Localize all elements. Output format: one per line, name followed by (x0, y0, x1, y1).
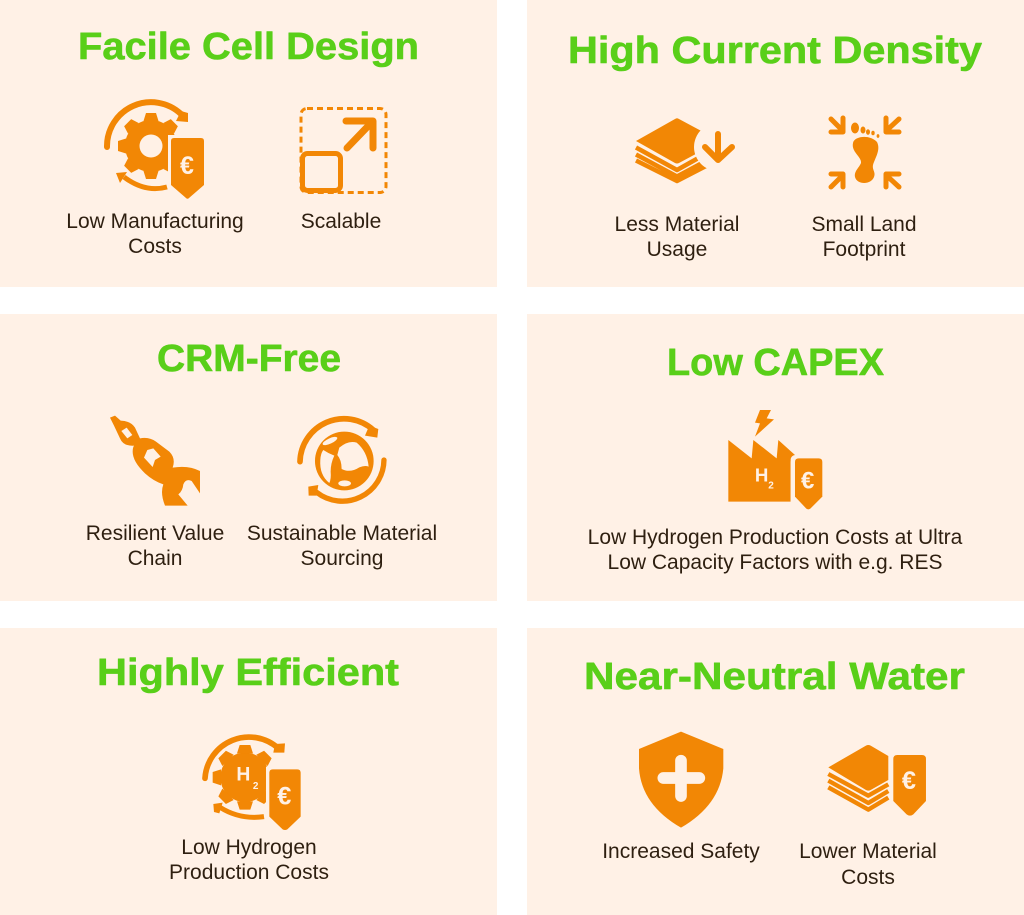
label: Less Material Usage: Usage (647, 238, 707, 261)
icon: footprint with inward arrows (831, 118, 899, 187)
label: Less Material Usage: Less Material (615, 213, 739, 236)
label: Sustainable Material Sourcing: Sustainable Material (247, 522, 437, 545)
icon: factory with lightning, H2 and euro tag: H (755, 465, 768, 486)
heading: Near-Neutral Water: Near-Neutral Water (584, 656, 965, 698)
panel: Highly Efficient (0, 628, 497, 915)
panel: Near-Neutral Water (527, 628, 1024, 915)
label: Resilient Value Chain: Chain (128, 547, 182, 570)
label: Low Hydrogen Production Costs: Low Hydrogen Production Costs at Ultra (588, 526, 962, 549)
icon: gear with euro tag (107, 102, 207, 202)
label: Lower Material Costs: Lower Material (799, 840, 937, 863)
panel background (527, 314, 1024, 601)
icon: scalable square (301, 108, 386, 192)
heading: Low CAPEX: Low CAPEX (667, 342, 885, 384)
icon: factory with lightning, H2 and euro tag (728, 410, 826, 512)
label: Low Manufacturing Costs: Costs (128, 235, 182, 258)
label: Low Manufacturing Costs: Low Manufacturing (66, 210, 244, 233)
label: Low Hydrogen Production Costs: Low Hydrogen (181, 836, 317, 859)
panel background (0, 628, 497, 915)
heading: Highly Efficient: Highly Efficient (97, 652, 399, 694)
icon: safety shield (639, 732, 723, 828)
icon: material stack with down arrow (636, 118, 742, 181)
icon: material stack with euro tag: € (902, 767, 916, 795)
heading: CRM-Free: CRM-Free (157, 338, 341, 380)
panel background (527, 0, 1024, 287)
label: Low Hydrogen Production Costs: Production Costs (169, 861, 329, 884)
icon: globe with circular arrows (300, 419, 384, 501)
panel: CRM-Free (0, 314, 497, 601)
label: Increased Safety: Increased Safety (602, 840, 760, 863)
label: Sustainable Material Sourcing: Sourcing (301, 547, 383, 570)
panel background (0, 0, 497, 287)
icon: factory with lightning, H2 and euro tag: 2 (768, 480, 774, 491)
icon: factory with lightning, H2 and euro tag: € (801, 467, 814, 494)
icon: H2 gear with euro tag: H (236, 765, 250, 786)
icon: chain with broken link (110, 416, 200, 506)
label: Small Land Footprint: Small Land (811, 213, 917, 236)
label: Low Hydrogen Production Costs: Low Capacity Factors with e.g. RES (608, 551, 942, 574)
label: Small Land Footprint: Footprint (823, 238, 906, 261)
panel background (0, 314, 497, 601)
icon: H2 gear with euro tag: € (277, 782, 291, 810)
heading: High Current Density: High Current Density (568, 30, 982, 72)
heading: Facile Cell Design: Facile Cell Design (78, 26, 419, 68)
icon: gear with euro tag: € (180, 152, 194, 180)
label: Resilient Value Chain: Resilient Value (86, 522, 224, 545)
icon: H2 gear with euro tag (205, 737, 303, 830)
label: Lower Material Costs: Costs (841, 866, 895, 889)
panel background (527, 628, 1024, 915)
panel: Facile Cell Design (0, 0, 497, 287)
icon: H2 gear with euro tag: 2 (253, 781, 259, 792)
icon: material stack with euro tag (828, 745, 926, 816)
panel: High Current Density (527, 0, 1024, 287)
panel: Low CAPEX (527, 314, 1024, 601)
label: Scalable: Scalable (301, 210, 381, 233)
